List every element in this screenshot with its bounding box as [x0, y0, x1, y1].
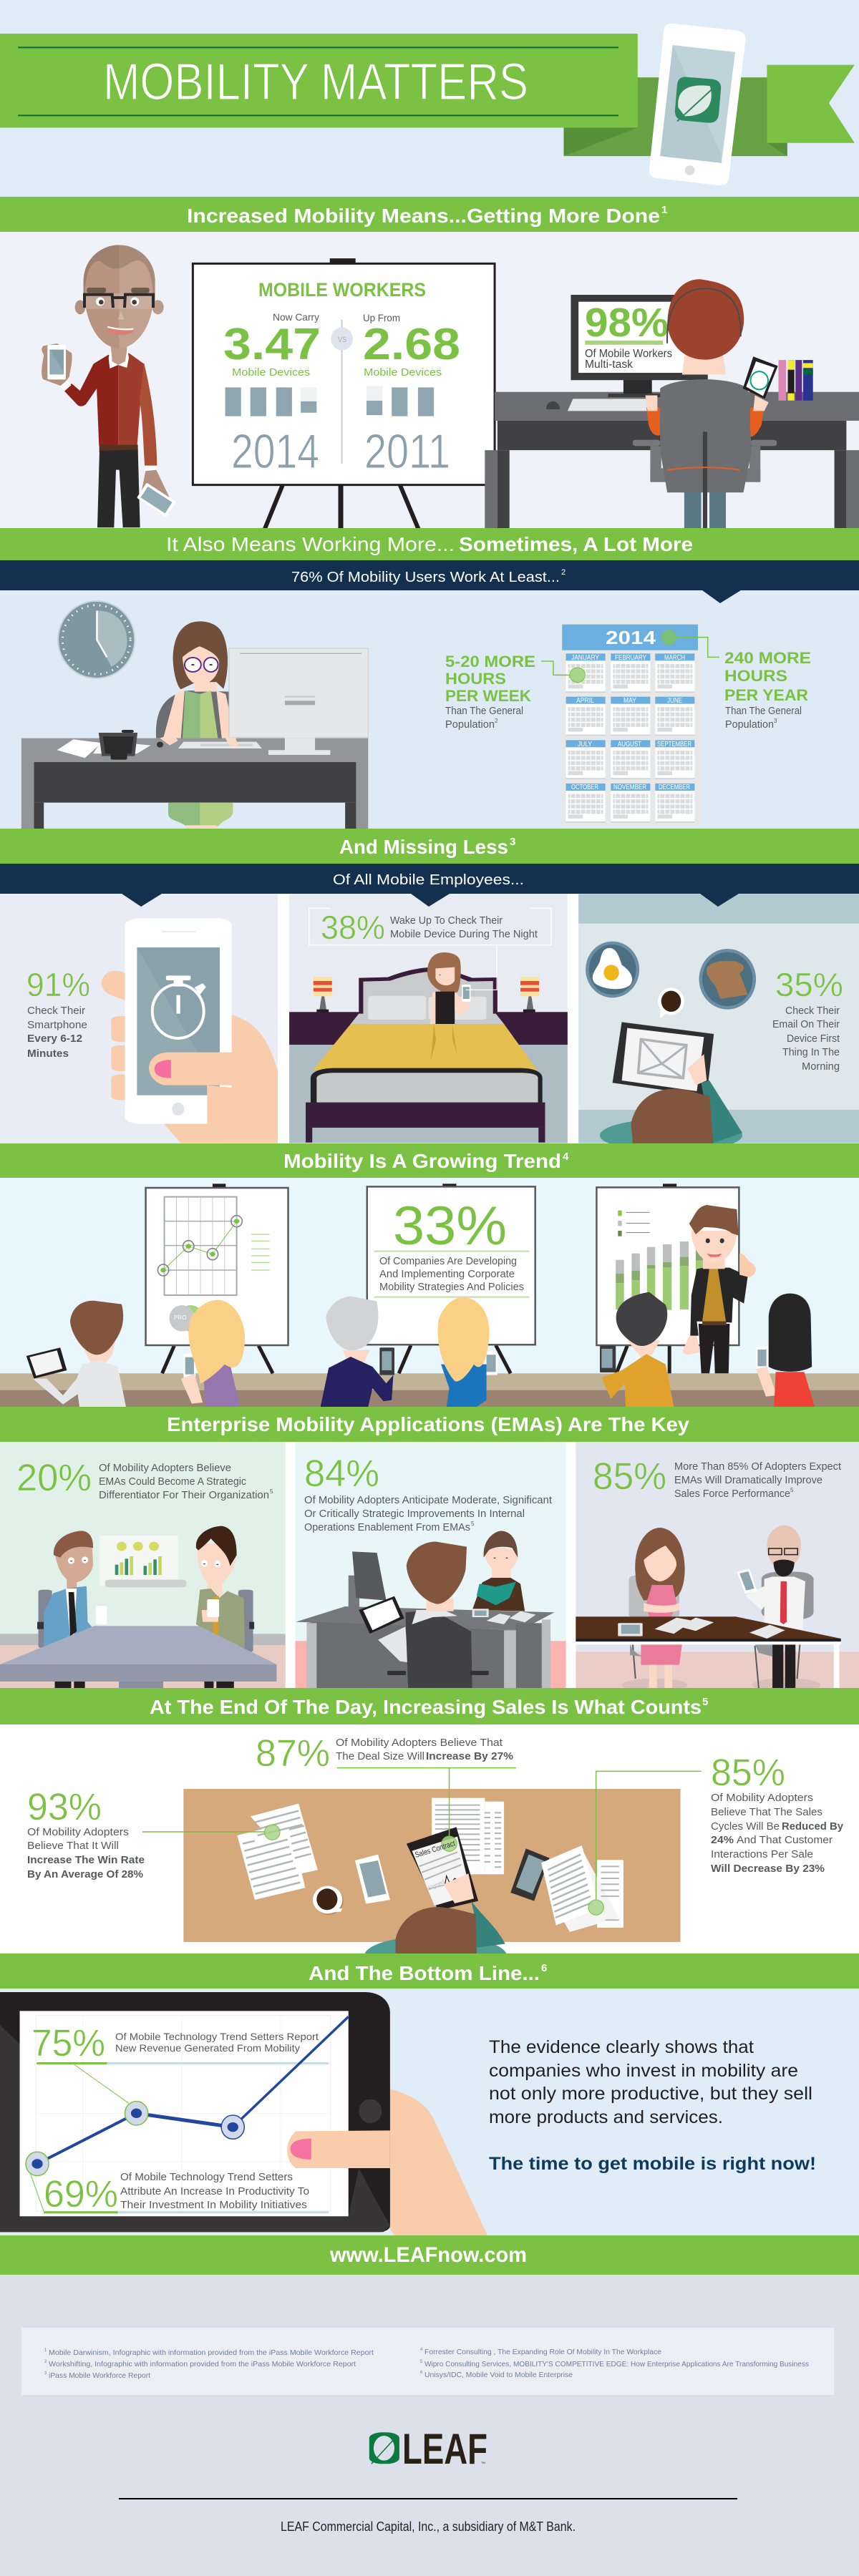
- stat: 85% sales cycles: [711, 1752, 844, 1875]
- stat: 87% deal size: 87%: [256, 1732, 330, 1775]
- panel: references: Wipro Consulting Services, MOBILITY'S COMPETITIVE EDGE: How Enterprise Applications Are Transforming Business: [424, 2360, 809, 2368]
- stat: 240 more hours per year: [724, 649, 811, 731]
- arms: [646, 408, 660, 436]
- person with tablet: [359, 1541, 489, 1688]
- grey-haired man: [321, 1297, 394, 1407]
- stat: 20%: EMAs Could Become A Strategic: [99, 1475, 246, 1488]
- woman: [629, 1528, 685, 1688]
- stat: 38%: [321, 909, 538, 946]
- conclusion text: not only more productive, but they sell: [489, 2084, 812, 2104]
- stat: 98% multi-task: [585, 300, 672, 371]
- panel: references: 6: [420, 2371, 423, 2375]
- stat: 98% multi-task: Multi-task: [585, 358, 633, 371]
- stat: 85% sales force: 5: [790, 1487, 794, 1493]
- stat: 91%: Check Their: [27, 1005, 85, 1017]
- stat: 87% deal size: Increase By 27%: [426, 1750, 513, 1762]
- stat: 75%: New Revenue Generated From Mobility: [115, 2042, 300, 2054]
- heading: working more: [166, 533, 693, 555]
- stat: 85% sales force: [593, 1455, 842, 1500]
- icon: coffee cup: [658, 987, 684, 1018]
- desk: [296, 1606, 554, 1688]
- panel: references: Workshifting, Infographic with information provided from the iPass Mobile Workforce Report: [49, 2360, 356, 2368]
- panel: 84% desk meeting: [295, 1442, 566, 1688]
- stat: 20%: 20%: [16, 1457, 92, 1499]
- stat: 69%: 69%: [44, 2173, 118, 2215]
- ribbon back: [563, 77, 787, 156]
- device bars 2011: [367, 387, 434, 416]
- stat: 240 more hours per year: HOURS: [724, 667, 787, 685]
- conclusion text: The evidence clearly shows that: [489, 2037, 754, 2057]
- icon: toast plate: [699, 949, 756, 1010]
- worker at desk from behind: [633, 279, 778, 531]
- panel text: mobile workers: VS: [338, 336, 346, 344]
- monitor: [344, 1551, 387, 1617]
- stat: 69%: Attribute An Increase In Productivity To: [120, 2185, 309, 2197]
- logo: LEAF: TM: [481, 2461, 485, 2464]
- stat: 93% win rate: Of Mobility Adopters: [27, 1826, 129, 1838]
- line chart: [26, 2016, 349, 2176]
- panel: mobile workers easel: [193, 258, 495, 531]
- stat: 75%: Of Mobile Technology Trend Setters Report: [115, 2031, 319, 2042]
- man left: [37, 1531, 107, 1648]
- board text: 33%: 33%: [393, 1196, 507, 1257]
- logo: LEAF: LEAF: [402, 2425, 487, 2473]
- stat: 38%: Wake Up To Check Their: [390, 914, 503, 927]
- stat: 5-20 more hours per week: [445, 653, 535, 731]
- stat: 5-20 more hours per week: Population: [445, 718, 495, 731]
- documents right: [541, 1845, 623, 1932]
- heading: missing less: And Missing Less: [339, 836, 508, 858]
- stat: 35%: Device First: [787, 1033, 840, 1045]
- board text: 33%: [174, 1196, 524, 1321]
- stat: 93% win rate: By An Average Of 28%: [27, 1868, 143, 1880]
- stat: 5-20 more hours per week: HOURS: [445, 670, 506, 688]
- calendar labels: AUGUST: [618, 741, 641, 748]
- panel: references: Unisys/IDC, Mobile Void to Mobile Enterprise: [424, 2371, 573, 2379]
- calendar labels: MAY: [623, 697, 636, 705]
- panel text: mobile workers: Now Carry: [273, 311, 319, 323]
- bed: [306, 967, 545, 1143]
- calendar labels: NOVEMBER: [613, 784, 646, 791]
- calendar labels: JUNE: [667, 697, 682, 705]
- heading: bottom line: 6: [541, 1962, 547, 1974]
- panel text: mobile workers: Mobile Devices: [232, 366, 310, 379]
- panel text: mobile workers: 3.47: [223, 320, 321, 369]
- panel: references: [21, 2328, 834, 2395]
- panel: references: 2: [44, 2360, 47, 2364]
- calendar labels: MARCH: [664, 654, 685, 662]
- stat: 87% deal size: Of Mobility Adopters Believe That: [336, 1737, 503, 1749]
- illustration: desktop from above: [183, 1789, 681, 1976]
- stat: 35%: Email On Their: [772, 1018, 840, 1030]
- monitor: [571, 295, 708, 397]
- panel: 20% meeting: [0, 1442, 286, 1688]
- stat: 87% deal size: The Deal Size Will: [336, 1750, 424, 1762]
- stat: 240 more hours per year: Population: [725, 718, 774, 731]
- desk with monitor and books: [485, 295, 859, 530]
- panel: references: Forrester Consulting , The Expanding Role Of Mobility In The Workplace: [424, 2348, 661, 2356]
- stat: 5-20 more hours per week: PER WEEK: [445, 687, 531, 705]
- text: sales contract on tablet: Sales Contract: [414, 1839, 456, 1860]
- stat: 5-20 more hours per week: 5-20 MORE: [445, 653, 535, 670]
- panel text: mobile workers: 2011: [364, 424, 450, 479]
- man right: [196, 1526, 254, 1652]
- stat: 5-20 more hours per week: Than The General: [445, 705, 523, 717]
- conclusion text: [489, 2037, 816, 2174]
- stat: 35%: Morning: [802, 1060, 840, 1073]
- stat: 240 more hours per year: 3: [774, 718, 777, 724]
- panel: 38% bedroom: [289, 894, 568, 1143]
- stat: 98% multi-task: 98%: [585, 300, 669, 346]
- dark-haired man: [600, 1292, 674, 1407]
- stat: 35%: [772, 966, 843, 1073]
- icon: tablet with envelope: [613, 1022, 714, 1096]
- stat: 38%: Mobile Device During The Night: [390, 928, 538, 940]
- calendar labels: SEPTEMBER: [657, 741, 691, 748]
- stat: 20%: [16, 1457, 273, 1501]
- stat: 85% sales force: EMAs Will Dramatically Improve: [674, 1474, 822, 1486]
- website link: www.LEAFnow.com: [329, 2243, 527, 2267]
- blonde in purple: [181, 1300, 245, 1407]
- panel: references: 3: [44, 2371, 47, 2376]
- panel: references: 1: [44, 2348, 47, 2353]
- stat: 85% sales cycles: And That Customer: [737, 1834, 833, 1846]
- heading: getting more done: Increased Mobility Means...Getting More Done: [187, 205, 660, 227]
- stat: 85% sales force: 85%: [593, 1455, 666, 1498]
- stat: 85% sales cycles: Reduced By: [782, 1820, 844, 1833]
- papers: [57, 739, 102, 758]
- woman: [162, 621, 237, 746]
- panel: references: 4: [420, 2348, 423, 2352]
- stat: 69%: Of Mobile Technology Trend Setters: [120, 2171, 293, 2183]
- stat: 75%: 75%: [31, 2022, 105, 2064]
- desk: [485, 392, 859, 530]
- subheading: 76% of mobility users: 76% Of Mobility Users Work At Least...: [291, 570, 560, 585]
- stat: 240 more hours per year: PER YEAR: [724, 686, 808, 704]
- tablet: [743, 356, 778, 399]
- stat: 240 more hours per year: Than The General: [725, 705, 802, 717]
- heading: working more: It Also Means Working More...: [166, 533, 455, 555]
- stat: 91%: Smartphone: [27, 1019, 87, 1031]
- stat: 91%: Every 6-12: [27, 1033, 82, 1045]
- board: 33%: [367, 1184, 535, 1345]
- icon: hand holding phone: [102, 918, 278, 1143]
- footer text: LEAF Commercial Capital, Inc., a subsidiary of M&T Bank.: [281, 2519, 576, 2534]
- calendar labels: 2014: [606, 627, 656, 648]
- board: bar chart: [596, 1184, 739, 1345]
- calendar labels: DECEMBER: [659, 784, 690, 791]
- board: chart: [146, 1184, 288, 1345]
- panel: 85% sales force: [576, 1442, 859, 1692]
- conclusion text: more products and services.: [489, 2107, 723, 2127]
- text: sales contract on tablet: [414, 1839, 456, 1892]
- document center: [432, 1798, 504, 1874]
- stat: 20%: Differentiator For Their Organization: [99, 1489, 269, 1501]
- stat: 85% sales force: Sales Force Performance: [674, 1488, 790, 1500]
- icon: clock: [58, 601, 135, 678]
- presenter: [682, 1205, 756, 1373]
- device bars 2014: [225, 387, 316, 416]
- panel: 91% smartphone check: [0, 894, 278, 1143]
- heading: missing less: 3: [510, 836, 515, 848]
- stat: 84%: Of Mobility Adopters Anticipate Moderate, Significant: [304, 1494, 553, 1506]
- panel text: mobile workers: [223, 279, 460, 479]
- dark phone: [510, 1848, 550, 1901]
- stat: 84%: Operations Enablement From EMAs: [304, 1521, 470, 1533]
- person from behind: [364, 1873, 507, 1976]
- panel text: mobile workers: Up From: [363, 312, 400, 323]
- stat: 35%: Check Their: [785, 1005, 840, 1017]
- heading: getting more done: 1: [661, 204, 667, 216]
- subheading: of all mobile employees: Of All Mobile Employees...: [333, 872, 524, 888]
- stat: 91%: [26, 966, 90, 1060]
- subheading: 76% of mobility users: 2: [561, 568, 566, 577]
- monitor: [229, 648, 368, 751]
- panel text: mobile workers: MOBILE WORKERS: [258, 279, 426, 301]
- person from behind: [600, 1054, 742, 1152]
- woman sitting up: [427, 952, 471, 1024]
- stat: 85% sales cycles: Cycles Will Be: [711, 1820, 780, 1833]
- stat: 85% sales cycles: 85%: [711, 1752, 785, 1794]
- panel: references: iPass Mobile Workforce Report: [49, 2371, 150, 2380]
- stat: 69%: Their Investment In Mobility Initiatives: [120, 2199, 307, 2211]
- person with tablet: [26, 1301, 126, 1407]
- stat: 240 more hours per year: 240 MORE: [724, 649, 811, 667]
- board text: 33%: Of Companies Are Developing: [379, 1255, 517, 1267]
- thumb: [287, 2130, 390, 2168]
- heading: increasing sales: 5: [702, 1696, 708, 1708]
- cup: [313, 1886, 344, 1915]
- calendar labels: FEBRUARY: [615, 654, 646, 662]
- easel legs: [162, 1345, 669, 1373]
- stat: 91%: Minutes: [27, 1048, 69, 1060]
- stat: 85% sales cycles: Interactions Per Sale: [711, 1848, 813, 1860]
- table: [576, 1616, 841, 1688]
- icon: phone: [649, 24, 746, 185]
- white phone: [355, 1855, 390, 1904]
- presentation board: [100, 1536, 186, 1587]
- panel: references: Mobile Darwinism, Infographic with information provided from the iPass Mobile Workforce Report: [49, 2348, 374, 2357]
- text: sales contract on tablet: Signed: [427, 1878, 445, 1892]
- telephone: [99, 730, 137, 760]
- stat: 5-20 more hours per week: 2: [495, 718, 498, 724]
- conference table: [0, 1626, 276, 1688]
- stat: 35%: 35%: [775, 966, 843, 1003]
- chart connectors: [142, 1768, 702, 1915]
- heading: EMAs are the key: Enterprise Mobility Applications (EMAs) Are The Key: [167, 1413, 689, 1435]
- calendar labels: OCTOBER: [571, 784, 598, 791]
- conclusion text: The time to get mobile is right now!: [489, 2154, 816, 2174]
- panel: tablet with growth chart: [0, 1992, 487, 2235]
- conference room illustration: [0, 1184, 859, 1407]
- chair: [633, 440, 777, 482]
- stat: 84%: [304, 1453, 553, 1533]
- stat: 20%: Of Mobility Adopters Believe: [99, 1462, 231, 1474]
- hand behind: [351, 2087, 487, 2235]
- heading: increasing sales: At The End Of The Day, Increasing Sales Is What Counts: [150, 1696, 702, 1718]
- logo: LEAF: [369, 2425, 487, 2473]
- title: MOBILITY MATTERS: [103, 54, 528, 111]
- stat: 85% sales cycles: Believe That The Sales: [711, 1806, 822, 1818]
- panel text: mobile workers: Mobile Devices: [364, 366, 442, 379]
- stat: 85% sales force: More Than 85% Of Adopters Expect: [674, 1460, 842, 1473]
- calendar labels: JULY: [578, 741, 592, 748]
- stat: 69%: [44, 2171, 309, 2215]
- stat: 93% win rate: Increase The Win Rate: [27, 1854, 145, 1866]
- bars: [37, 2062, 329, 2213]
- blonde in blue: [437, 1297, 498, 1407]
- woman in red: [756, 1294, 815, 1407]
- heading: growing trend: Mobility Is A Growing Trend: [283, 1150, 561, 1172]
- bald man with tablet: [737, 1526, 813, 1631]
- calendar labels: JANUARY: [571, 654, 599, 662]
- stat: 98% multi-task: Of Mobile Workers: [585, 348, 672, 360]
- stat: 87% deal size: [256, 1732, 513, 1775]
- stat: 84%: Or Critically Strategic Improvements In Internal: [304, 1508, 525, 1520]
- office worker, clock and desk: [21, 601, 368, 830]
- stat: 93% win rate: Believe That It Will: [27, 1840, 119, 1852]
- stat: 35%: Thing In The: [782, 1046, 840, 1058]
- calendar labels: [571, 627, 691, 791]
- desk: [21, 738, 368, 830]
- panel text: mobile workers: 2.68: [363, 320, 460, 369]
- heading: growing trend: 4: [563, 1151, 569, 1163]
- stat: 85% sales cycles: Will Decrease By 23%: [711, 1863, 825, 1875]
- panel: references: 5: [420, 2360, 423, 2364]
- chair: [156, 691, 230, 739]
- stat: 38%: 38%: [321, 909, 385, 946]
- icon: egg plate: [586, 942, 639, 997]
- board text: 33%: PRO: [174, 1314, 186, 1321]
- tablet body: [0, 1992, 390, 2232]
- stat: 93% win rate: [27, 1786, 145, 1880]
- section illustration: mobile worker with phones: [42, 245, 176, 527]
- panel text: mobile workers: 2014: [231, 424, 319, 479]
- stat: 85% sales cycles: Of Mobility Adopters: [711, 1792, 813, 1804]
- stat: 85% sales cycles: 24%: [711, 1834, 734, 1846]
- lamps: [314, 977, 539, 1013]
- man across desk: [472, 1531, 525, 1611]
- stat: 84%: 84%: [304, 1453, 379, 1495]
- stat: 20%: 5: [270, 1488, 273, 1495]
- board text: 33%: Mobility Strategies And Policies: [379, 1281, 524, 1293]
- header ribbon and phone: [0, 24, 855, 185]
- calendar 2014: [541, 623, 719, 825]
- heading: bottom line: And The Bottom Line...: [309, 1962, 540, 1984]
- tablet signing contract: [407, 1827, 478, 1911]
- board text: 33%: And Implementing Corporate: [379, 1268, 515, 1280]
- heading: working more: Sometimes, A Lot More: [459, 533, 693, 555]
- panel: 35% breakfast: [578, 894, 859, 1152]
- conclusion text: companies who invest in mobility are: [489, 2061, 798, 2081]
- document left: [237, 1804, 318, 1900]
- stat: 84%: 5: [471, 1521, 475, 1527]
- stat: 75%: [31, 2022, 319, 2064]
- stat: 91%: 91%: [26, 966, 90, 1003]
- books: [778, 360, 813, 401]
- calendar labels: APRIL: [576, 697, 594, 705]
- stat: 93% win rate: 93%: [27, 1786, 102, 1828]
- audience: [26, 1292, 815, 1407]
- dress hem: [168, 803, 233, 826]
